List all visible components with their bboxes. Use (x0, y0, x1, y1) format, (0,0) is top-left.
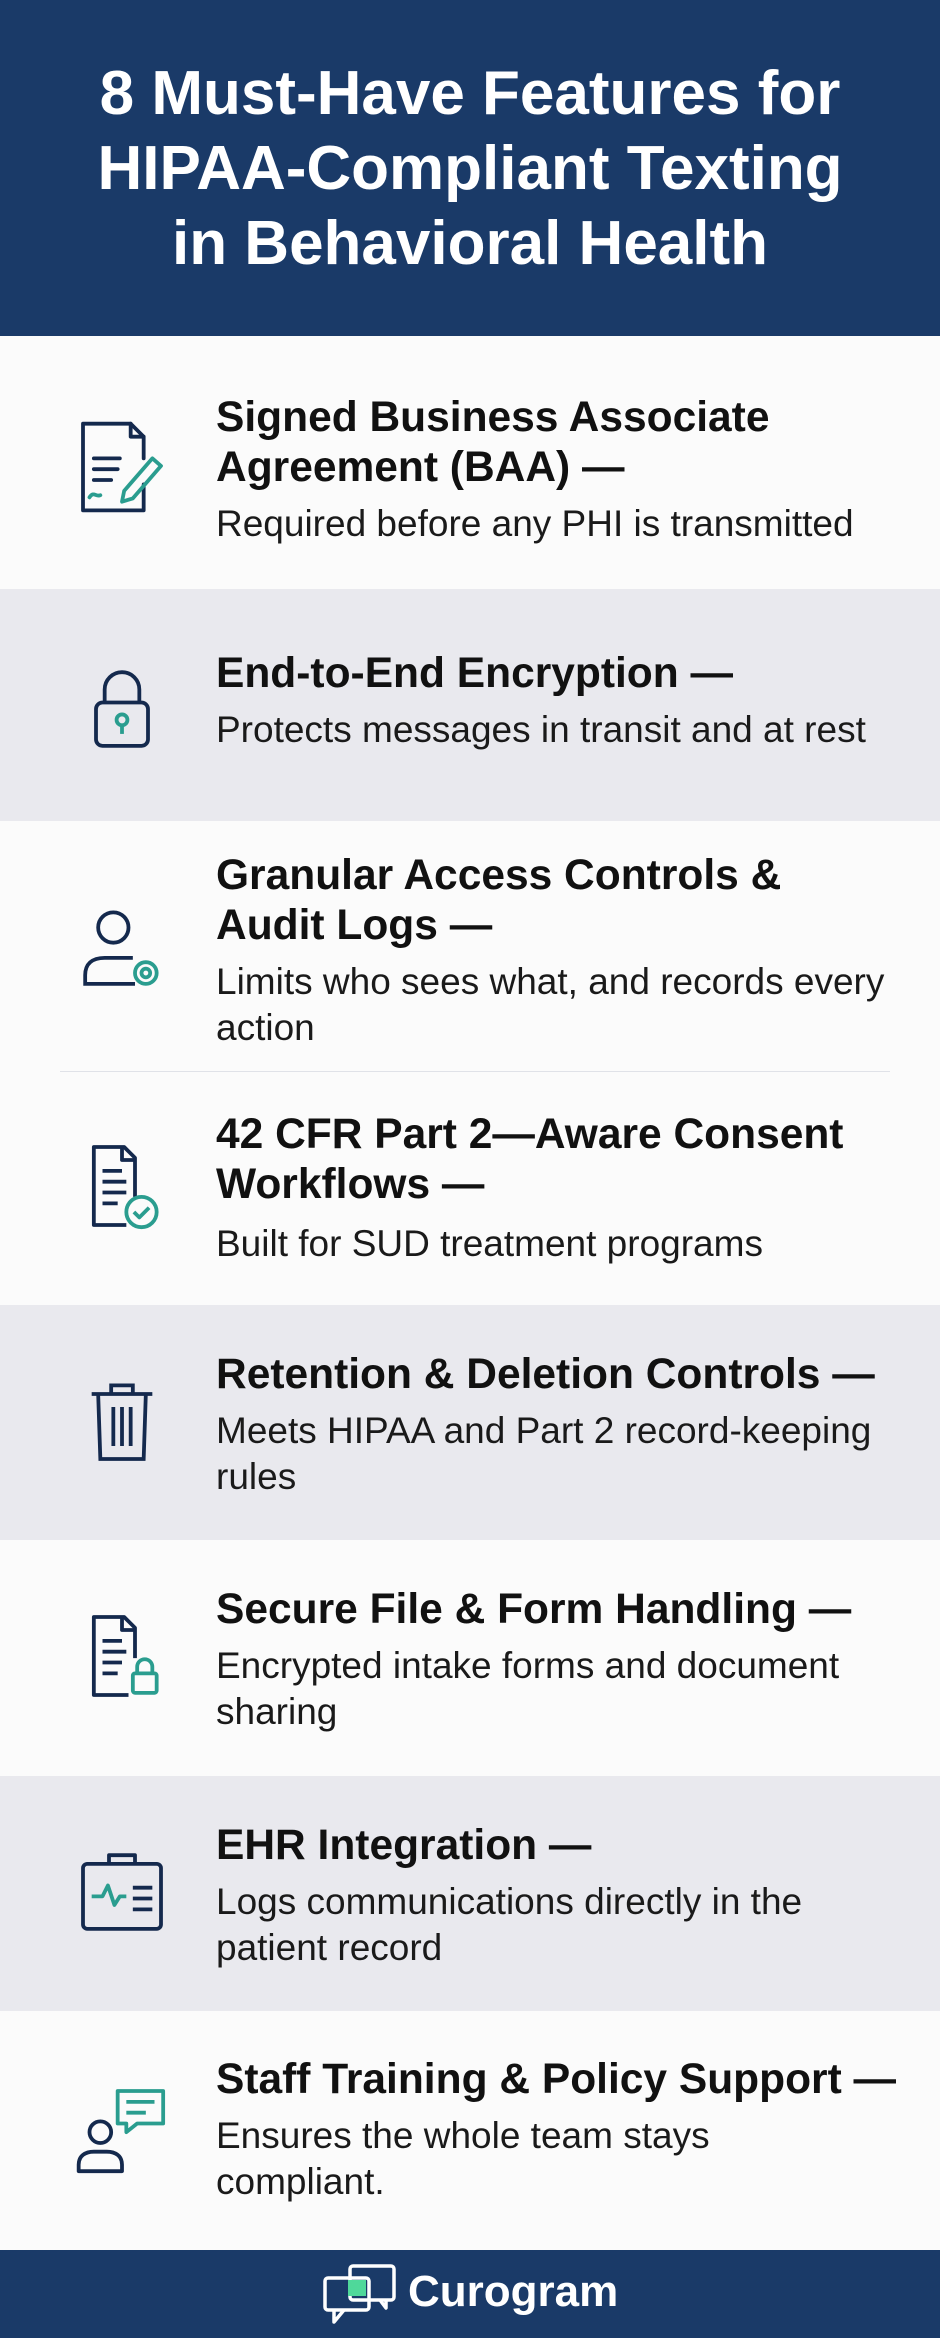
text: retention: Meets HIPAA and Part 2 record-keeping (216, 1410, 871, 1451)
icon: clipboard with pulse (81, 1853, 163, 1931)
icon: chat bubbles logo (323, 2264, 396, 2324)
icon: user with gear (83, 910, 159, 986)
text: retention (216, 1351, 875, 1497)
text: encryption: Protects messages in transit and at rest (216, 709, 866, 750)
text: consent workflows (216, 1111, 843, 1264)
text: access controls (216, 852, 884, 1048)
icon: lock (94, 670, 150, 748)
text: encryption: End-to-End Encryption — (216, 650, 733, 697)
text: staff training: Staff Training & Policy Support — (216, 2056, 896, 2103)
text: staff training: compliant. (216, 2161, 385, 2202)
text: file handling: Secure File & Form Handling — (216, 1586, 851, 1633)
text: access controls: Audit Logs — (216, 902, 492, 949)
text: encryption (216, 650, 866, 750)
text: file handling: Encrypted intake forms and document (216, 1645, 839, 1686)
text: staff training (216, 2056, 896, 2202)
text: consent workflows: Workflows — (216, 1161, 484, 1208)
text: access controls: Granular Access Controls & (216, 852, 781, 899)
panel: EHR (0, 1776, 940, 2011)
panel: consent workflows (92, 1111, 843, 1264)
text: EHR (216, 1822, 802, 1968)
text: EHR: EHR Integration — (216, 1822, 591, 1869)
text: staff training: Ensures the whole team stays (216, 2115, 710, 2156)
icon: trash (92, 1384, 152, 1461)
title: in Behavioral Health (172, 209, 768, 278)
text: file handling (216, 1586, 852, 1732)
panel: retention (0, 1305, 940, 1540)
text: BAA: Required before any PHI is transmitted (216, 503, 854, 544)
text: BAA (216, 394, 854, 544)
title: 8 Must-Have Features for (100, 59, 840, 128)
text: retention: rules (216, 1456, 296, 1497)
panel: staff training (76, 2056, 896, 2202)
footer: brand name: Curogram (408, 2267, 618, 2316)
icon: person with chat (76, 2089, 166, 2174)
panel: encryption (0, 589, 940, 821)
panel: access controls (83, 852, 884, 1048)
panel: file handling (92, 1586, 852, 1732)
text: access controls: action (216, 1007, 315, 1048)
text: consent workflows: 42 CFR Part 2—Aware Consent (216, 1111, 843, 1158)
text: BAA: Agreement (BAA) — (216, 444, 625, 491)
footer: logo (0, 2250, 940, 2338)
title: HIPAA-Compliant Texting (97, 134, 843, 203)
text: EHR: patient record (216, 1927, 442, 1968)
text: consent workflows: Built for SUD treatment programs (216, 1223, 763, 1264)
text: access controls: Limits who sees what, and records every (216, 961, 884, 1002)
text: EHR: Logs communications directly in the (216, 1881, 802, 1922)
title (0, 0, 940, 336)
text: BAA: Signed Business Associate (216, 394, 769, 441)
icon: document with lock (92, 1615, 159, 1697)
icon: signed document (81, 422, 163, 512)
panel: BAA (81, 394, 854, 544)
text: retention: Retention & Deletion Controls — (216, 1351, 875, 1398)
text: file handling: sharing (216, 1691, 337, 1732)
icon: document with check (92, 1145, 159, 1230)
